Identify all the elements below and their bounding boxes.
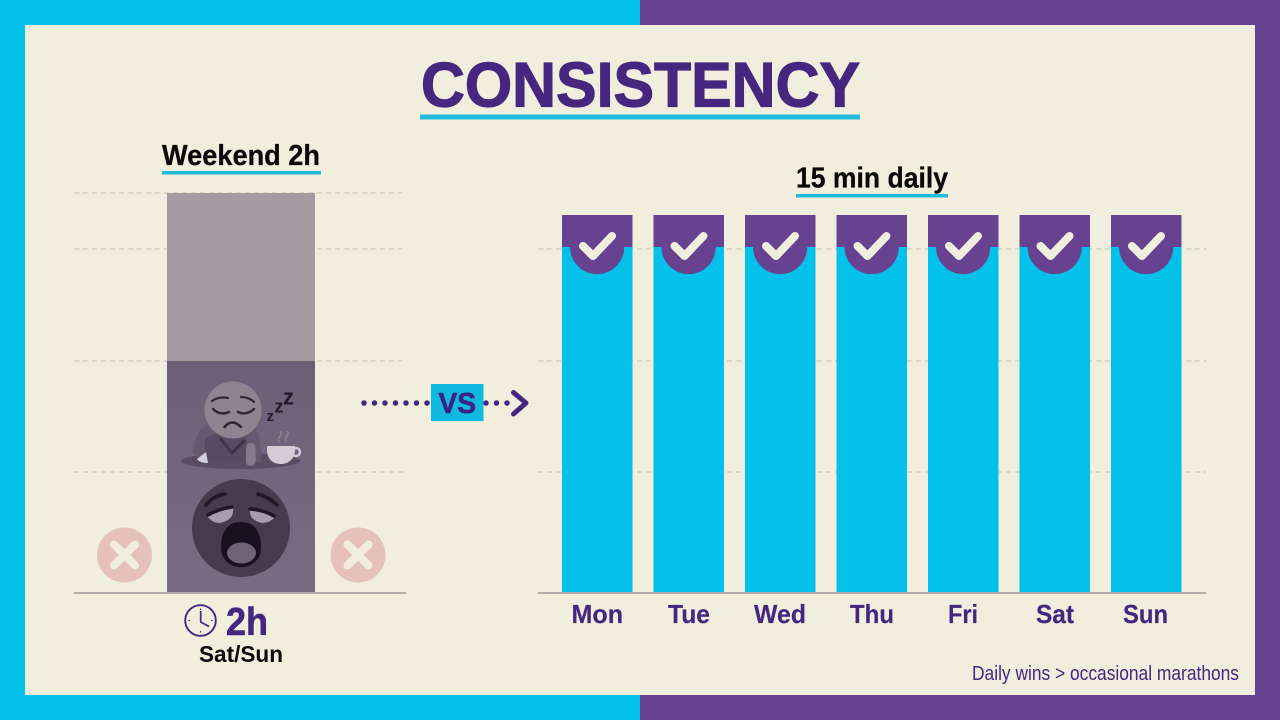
bar: Wed [745, 215, 816, 593]
vs badge [431, 384, 484, 421]
bar: Thu [836, 215, 907, 593]
icon: left red cross [97, 528, 152, 582]
bar: Sat [1020, 215, 1090, 593]
bar: Tue [654, 215, 724, 593]
title: CONSISTENCY [421, 50, 860, 120]
weekday labels: Fri [948, 599, 978, 629]
vs badge: VS [438, 388, 476, 420]
weekday labels: Tue [668, 599, 710, 629]
bar: Sun [1111, 215, 1182, 593]
icon: tired person with coffee: z [274, 396, 284, 416]
vs arrow [364, 384, 526, 421]
weekday labels: Mon [572, 599, 623, 629]
weekday labels [572, 599, 1168, 629]
panel: weekend chart [74, 140, 406, 667]
bar: Fri [928, 215, 998, 593]
weekend bar [167, 193, 315, 593]
footnote: Daily wins > occasional marathons [972, 663, 1239, 685]
icon: tired person with coffee: z [283, 384, 294, 410]
duration label: 2h [226, 601, 268, 644]
weekend days label: Sat/Sun [199, 641, 283, 667]
left baseline [74, 592, 406, 594]
weekday labels: Thu [850, 599, 894, 629]
left chart heading: Weekend 2h [162, 140, 320, 172]
icon: tired person with coffee: z [266, 408, 274, 425]
weekday labels: Wed [754, 599, 806, 629]
bar: Mon [562, 215, 632, 593]
right baseline [538, 592, 1206, 594]
icon: tired person with coffee [181, 382, 300, 469]
right chart heading: 15 min daily [796, 162, 948, 194]
weekday labels: Sat [1036, 599, 1074, 629]
panel: daily chart [538, 162, 1206, 629]
icon: yawning face [192, 479, 290, 577]
weekday labels: Sun [1123, 599, 1168, 629]
icon: right red cross [330, 528, 386, 582]
icon: clock [185, 605, 216, 636]
